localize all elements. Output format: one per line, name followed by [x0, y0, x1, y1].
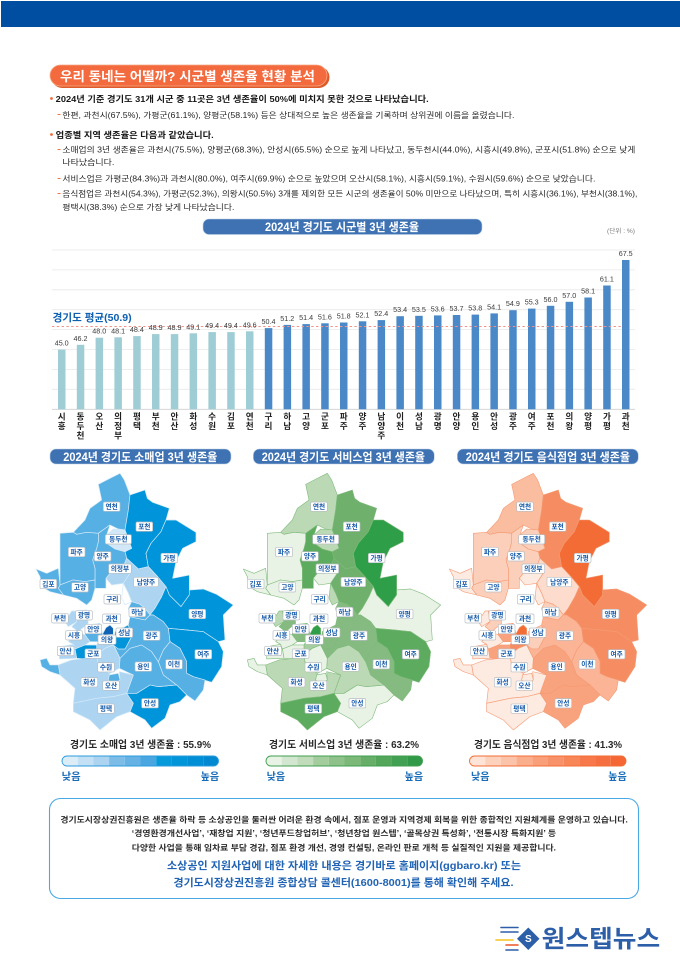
bar chart: 3-year survival by city: [52, 249, 635, 440]
map: restaurant survival by city: 하남: [545, 607, 557, 616]
map: service survival by city: 가평: [371, 553, 383, 562]
map: service survival by city: 광주: [353, 631, 365, 640]
map: retail survival by city: 고양: [74, 583, 86, 592]
map: restaurant survival by city: 김포: [456, 579, 468, 588]
map: restaurant survival by city: 의정부: [524, 564, 543, 573]
bar chart: 3-year survival by city: 명: [434, 420, 442, 431]
map: service survival by city: [243, 473, 441, 730]
bar chart: 3-year survival by city: 52.1: [356, 310, 370, 319]
heading pill: bar chart title: [203, 219, 482, 234]
bar chart: 3-year survival by city: 시: [58, 412, 66, 422]
bar chart: 3-year survival by city: 양: [359, 410, 367, 422]
map: service survival by city: 이천: [375, 660, 387, 669]
map: restaurant survival by city: 평택: [513, 704, 525, 713]
bar chart: 3-year survival by city: 천: [622, 420, 630, 431]
bar chart: 3-year survival by city: 주: [377, 430, 385, 440]
bar chart: 3-year survival by city: 남: [283, 420, 291, 431]
bar chart: 3-year survival by city: 광: [434, 410, 442, 422]
map: retail survival by city: 오산: [105, 681, 117, 690]
map: retail survival by city: 여주: [197, 650, 209, 659]
map: service survival by city: 안양: [295, 624, 307, 633]
bar chart: 3-year survival by city: 천: [246, 420, 254, 431]
legend: retail scale: 높음: [201, 771, 219, 783]
bar chart: 3-year survival by city: 46.2: [74, 334, 88, 343]
map: service survival by city: 안성: [351, 699, 363, 708]
bar chart: 3-year survival by city: 48.9: [168, 323, 182, 332]
map: retail survival by city: [36, 473, 233, 730]
panel: support programs notice: [50, 798, 638, 898]
map: service survival by city: 구리: [314, 595, 326, 604]
bar chart: 3-year survival by city: 양: [584, 410, 592, 422]
bar chart: 3-year survival by city: 안: [490, 412, 498, 422]
bar chart: 3-year survival by city: 포: [321, 421, 329, 431]
map: service survival by city: 용인: [345, 662, 357, 671]
map: retail survival by city: 군포: [87, 650, 99, 658]
map: restaurant survival by city: 과천: [519, 614, 531, 623]
bar chart: 3-year survival by city: 인: [471, 421, 479, 431]
map: retail survival by city: 가평: [163, 553, 175, 562]
map: service survival by city: 여주: [405, 650, 417, 659]
map: retail survival by city: 동두천: [109, 535, 128, 544]
map: restaurant survival by city: 포천: [552, 522, 564, 531]
bar chart: 3-year survival by city: 평: [603, 421, 611, 431]
bar chart: 3-year survival by city: 이: [396, 412, 404, 422]
bar chart: 3-year survival by city: 주: [528, 421, 536, 431]
bar chart: 3-year survival by city: 49.1: [186, 322, 200, 331]
panel: support programs notice: 소상공인 지원사업에 대한 자세한 내용은 경기바로 홈페이지(ggbaro.kr) 또는: [167, 859, 521, 872]
text block: key findings: 나타났습니다.: [62, 157, 114, 167]
map: service survival by city: 수원: [307, 663, 319, 672]
map: restaurant survival by city: 수원: [513, 663, 525, 672]
bar chart: 3-year survival by city: 안: [171, 412, 179, 422]
legend: retail scale: 낮음: [62, 770, 81, 783]
bar chart: 3-year survival by city: 부: [152, 412, 160, 422]
map: restaurant survival by city: 고양: [487, 583, 499, 592]
map: retail survival by city: 광주: [146, 631, 158, 640]
text block: key findings: 음식점업은 과천시(54.3%), 가평군(52.3%), 의왕시(50.5%) 3개를 제외한 모든 시군의 생존율이 50% 미만으로 나타났으며, 특히 시흥시(36.1%), 부천시(38.1%),: [62, 188, 637, 198]
bar chart: 3-year survival by city: 천: [77, 430, 85, 440]
bar chart: 3-year survival by city: 남: [377, 410, 385, 422]
bar chart: 3-year survival by city: 군: [321, 412, 329, 422]
map summary: retail: 경기도 소매업 3년 생존율 : 55.9%: [70, 738, 211, 751]
map: service survival by city: 오산: [312, 681, 324, 690]
logo: Onestep News: 원스텝뉴스: [542, 926, 660, 953]
legend: service scale: 낮음: [267, 770, 285, 783]
bar chart: 3-year survival by city: 파: [340, 412, 348, 422]
bar chart: 3-year survival by city: 49.4: [224, 321, 238, 330]
map: retail survival by city: 연천: [106, 502, 118, 511]
map: retail survival by city: 의정부: [111, 564, 129, 573]
map: retail survival by city: 안양: [87, 624, 99, 633]
bar chart: 3-year survival by city: 57.0: [562, 291, 576, 300]
bar chart: 3-year survival by city: 연: [246, 410, 254, 422]
bar chart: 3-year survival by city: 56.0: [544, 295, 558, 304]
bar chart: 3-year survival by city: 김: [227, 410, 235, 422]
bar chart: 3-year survival by city: 성: [415, 412, 423, 422]
map: restaurant survival by city: 이천: [581, 660, 593, 669]
bar chart: 3-year survival by city: 용: [471, 412, 479, 422]
bar chart: 3-year survival by city: 리: [265, 421, 272, 431]
map: restaurant survival by city: 연천: [519, 502, 531, 511]
bar chart: 3-year survival by city: 구: [265, 412, 273, 422]
heading pill: retail map: 2024년 경기도 소매업 3년 생존율: [63, 450, 218, 464]
map: restaurant survival by city: 양주: [510, 552, 522, 561]
bar chart: 3-year survival by city: 53.8: [468, 304, 482, 313]
bar chart: 3-year survival by city: 고: [302, 412, 310, 422]
bar chart: 3-year survival by city: 의: [114, 412, 122, 422]
map: restaurant survival by city: 오산: [518, 681, 530, 690]
bar chart: 3-year survival by city: 51.8: [337, 312, 351, 320]
map: service survival by city: 과천: [313, 614, 325, 623]
map: retail survival by city: 용인: [137, 662, 149, 671]
map: restaurant survival by city: 시흥: [481, 631, 493, 640]
map: restaurant survival by city: 성남: [532, 628, 544, 637]
map: service survival by city: 연천: [313, 502, 325, 511]
bar chart: 3-year survival by city: 의: [565, 412, 573, 422]
bar chart: 3-year survival by city: 정: [114, 420, 122, 431]
bar chart: 3-year survival by city: 주: [359, 421, 367, 431]
map: service survival by city: 의왕: [308, 635, 320, 644]
map: retail survival by city: 광명: [78, 611, 90, 620]
map: service survival by city: 동두천: [316, 535, 335, 544]
bar chart: 3-year survival by city: 52.4: [374, 309, 388, 318]
legend: service scale: 높음: [405, 771, 423, 783]
map: service survival by city: 시흥: [275, 631, 287, 640]
map: restaurant survival by city: 화성: [497, 678, 509, 687]
bar chart: 3-year survival by city: 51.6: [318, 312, 332, 321]
text block: key findings: 소매업의 3년 생존율은 과천시(75.5%), 양평군(68.3%), 안성시(65.5%) 순으로 높게 나타났고, 동두천시(44.0%), 시흥시(49.8%), 군포시(51.8%) 순으로 낮게: [62, 144, 635, 154]
bar chart: 3-year survival by city: 49.6: [243, 320, 257, 329]
heading pill: section title: 우리 동네는 어떨까? 시군별 생존율 현황 분석: [60, 69, 315, 84]
bar chart: 3-year survival by city: 남: [415, 420, 423, 431]
text block: key findings: 한편, 과천시(67.5%), 가평군(61.1%), 양평군(58.1%) 등은 상대적으로 높은 생존율을 기록하며 상위권에 이름을 올렸습니다.: [62, 110, 514, 120]
callout: Gyeonggi average: 경기도 평균(50.9): [53, 311, 132, 324]
bar chart: 3-year survival by city: 하: [283, 410, 291, 422]
text block: key findings: 2024년 기준 경기도 31개 시군 중 11곳은 3년 생존율이 50%에 미치지 못한 것으로 나타났습니다.: [56, 94, 429, 104]
heading pill: bar chart title: 2024년 경기도 시군별 3년 생존율: [265, 220, 419, 234]
bar chart: 3-year survival by city: 천: [547, 420, 555, 431]
map: restaurant survival by city: 용인: [551, 662, 563, 671]
map: service survival by city: 광명: [285, 611, 297, 620]
map: restaurant survival by city: [449, 473, 647, 730]
bar chart: 3-year survival by city: 가: [603, 410, 611, 422]
map: restaurant survival by city: 구리: [520, 595, 532, 604]
panel: support programs notice: ‘경영환경개선사업’, ‘재창업 지원’, ‘청년푸드창업허브’, ‘청년창업 원스텝’, ‘골목상권 특성화’, ‘전통시장 특화지원’ 등: [132, 828, 557, 838]
legend: restaurant scale: [470, 756, 627, 783]
map: retail survival by city: 안산: [60, 646, 72, 655]
bar chart: 3-year survival by city: 50.4: [262, 317, 276, 326]
map: service survival by city: 의정부: [318, 564, 337, 573]
map: service survival by city: 파주: [278, 547, 290, 556]
map: restaurant survival by city: 안산: [473, 646, 485, 655]
bar chart: 3-year survival by city: 동: [77, 412, 85, 422]
text block: key findings: [50, 94, 637, 212]
map: restaurant survival by city: 안성: [557, 699, 569, 708]
map summary: service: 경기도 서비스업 3년 생존율 : 63.2%: [269, 738, 419, 751]
map: retail survival by city: 포천: [138, 522, 150, 531]
map: retail survival by city: 성남: [118, 628, 130, 637]
bar chart: 3-year survival by city: 양: [302, 420, 310, 431]
panel: support programs notice: 경기도시장상권진흥원 종합상담 콜센터(1600-8001)를 통해 확인해 주세요.: [174, 876, 514, 889]
bar chart: 3-year survival by city: 성: [189, 421, 197, 431]
bar chart: 3-year survival by city: 포: [547, 412, 555, 422]
map: restaurant survival by city: 군포: [501, 650, 513, 658]
map: restaurant survival by city: 광주: [559, 631, 571, 640]
bar chart: 3-year survival by city: 수: [208, 412, 216, 422]
map: restaurant survival by city: 가평: [577, 553, 589, 562]
text block: key findings: 평택시(38.3%) 순으로 가장 낮게 나타났습니다.: [62, 202, 234, 212]
map: service survival by city: 하남: [339, 607, 351, 616]
bar chart: 3-year survival by city: 48.1: [111, 326, 125, 335]
bar chart: 3-year survival by city: 51.4: [299, 313, 313, 322]
map: restaurant survival by city: 부천: [467, 614, 479, 623]
map: restaurant survival by city: 안양: [501, 624, 513, 633]
map: service survival by city: 김포: [250, 579, 262, 588]
map: retail survival by city: 하남: [131, 607, 143, 616]
bar chart: 3-year survival by city: 안: [453, 412, 461, 422]
bar chart: 3-year survival by city: 천: [152, 420, 160, 431]
map: service survival by city: 평택: [307, 704, 319, 713]
panel: support programs notice: 다양한 사업을 통해 임차료 부담 경감, 점포 환경 개선, 경영 컨설팅, 온라인 판로 개척 등 실질적인 지원을 제공합니다.: [132, 842, 556, 852]
bar chart: 3-year survival by city: 왕: [565, 420, 573, 431]
bar chart: 3-year survival by city: 광: [509, 410, 517, 422]
heading pill: restaurant map: 2024년 경기도 음식점업 3년 생존율: [466, 450, 630, 464]
legend: service scale: [266, 756, 423, 783]
bar chart: 3-year survival by city: 53.5: [412, 305, 426, 314]
bar chart: 3-year survival by city: 화: [189, 410, 197, 422]
bar chart: 3-year survival by city: 48.0: [92, 327, 106, 336]
map: restaurant survival by city: 파주: [484, 547, 496, 556]
bar chart: 3-year survival by city: 45.0: [55, 339, 69, 348]
map: service survival by city: 성남: [326, 628, 338, 637]
bar chart: 3-year survival by city: 과: [622, 410, 630, 422]
panel: support programs notice: 경기도시장상권진흥원은 생존율 하락 등 소상공인을 둘러싼 어려운 환경 속에서, 점포 운영과 지역경제 회복을 위한 종합적인 지원체계를 운영하고 있습니다.: [60, 814, 628, 824]
map: service survival by city: 남양주: [344, 577, 363, 586]
map: retail survival by city: 수원: [100, 663, 112, 672]
map: service survival by city: 포천: [346, 522, 358, 531]
bar chart: 3-year survival by city: 평: [133, 412, 141, 422]
bar chart: 3-year survival by city: 51.2: [280, 314, 294, 323]
map: service survival by city: 양주: [304, 552, 316, 561]
bar chart: 3-year survival by city: 두: [77, 421, 85, 431]
bar chart: 3-year survival by city: 54.1: [487, 302, 501, 311]
logo: Onestep News: S: [525, 934, 532, 945]
map: retail survival by city: 부천: [54, 614, 66, 623]
bar chart: 3-year survival by city: 포: [227, 421, 235, 431]
bar chart: 3-year survival by city: 55.3: [525, 298, 539, 307]
map: retail survival by city: 남양주: [137, 577, 155, 586]
bar chart: 3-year survival by city: 원: [208, 420, 216, 431]
map: retail survival by city: 화성: [83, 678, 95, 687]
map: restaurant survival by city: 양평: [605, 609, 617, 618]
bar chart: 3-year survival by city: 53.6: [431, 304, 445, 313]
map: service survival by city: 안산: [267, 646, 279, 655]
heading pill: service map: 2024년 경기도 서비스업 3년 생존율: [262, 450, 425, 464]
map: retail survival by city: 이천: [168, 660, 180, 669]
map: retail survival by city: 양평: [191, 609, 203, 618]
text block: key findings: 업종별 지역 생존율은 다음과 같았습니다.: [56, 130, 214, 140]
bar chart: 3-year survival by city: 택: [133, 420, 141, 431]
bar chart: 3-year survival by city: 산: [95, 420, 103, 431]
bar chart: 3-year survival by city: 천: [396, 420, 404, 431]
text block: key findings: 서비스업은 가평군(84.3%)과 과천시(80.0%), 여주시(69.9%) 순으로 높았으며 오산시(58.1%), 시흥시(59.1%), 수원시(59.6%) 순으로 낮았습니다.: [62, 174, 595, 184]
bar chart: 3-year survival by city: 부: [114, 430, 122, 440]
unit note: (단위 : %): [607, 227, 635, 235]
bar chart: 3-year survival by city: 성: [490, 421, 498, 431]
map: retail survival by city: 양주: [97, 552, 109, 561]
map: retail survival by city: 의왕: [101, 635, 113, 644]
map: retail survival by city: 구리: [106, 595, 118, 604]
map: restaurant survival by city: 동두천: [522, 535, 541, 544]
bar chart: 3-year survival by city: 48.4: [130, 325, 144, 334]
bar chart: 3-year survival by city: 양: [453, 420, 461, 431]
bar chart: 3-year survival by city: 61.1: [600, 274, 614, 284]
bar chart: 3-year survival by city: 67.5: [619, 249, 633, 258]
bar chart: 3-year survival by city: 49.4: [205, 321, 219, 330]
bar chart: 3-year survival by city: 58.1: [581, 286, 595, 296]
bar chart: 3-year survival by city: 산: [171, 420, 179, 431]
bar chart: 3-year survival by city: 48.9: [149, 323, 163, 332]
legend: retail scale: [62, 756, 219, 783]
map: restaurant survival by city: 의왕: [514, 635, 526, 644]
map: service survival by city: 부천: [261, 614, 273, 623]
map: retail survival by city: 평택: [100, 704, 112, 713]
map: service survival by city: 고양: [281, 583, 293, 592]
map: retail survival by city: 파주: [71, 547, 83, 556]
map: retail survival by city: 김포: [42, 579, 54, 588]
bar chart: 3-year survival by city: 평: [584, 421, 592, 431]
bar chart: 3-year survival by city: 여: [528, 410, 536, 422]
bar chart: 3-year survival by city: 양: [377, 420, 385, 431]
legend: restaurant scale: 낮음: [471, 770, 490, 783]
map: retail survival by city: 과천: [106, 614, 118, 623]
map: service survival by city: 군포: [295, 650, 307, 658]
map summary: restaurant: 경기도 음식점업 3년 생존율 : 41.3%: [474, 738, 622, 751]
heading pill: section title: [50, 65, 330, 88]
bar chart: 3-year survival by city: 흥: [58, 420, 66, 431]
logo: Onestep News: [496, 926, 660, 953]
map: service survival by city: 화성: [291, 678, 303, 687]
map: retail survival by city: 시흥: [68, 631, 80, 640]
map: restaurant survival by city: 광명: [491, 611, 503, 620]
bar chart: 3-year survival by city: 오: [95, 412, 103, 422]
map: restaurant survival by city: 남양주: [550, 577, 569, 586]
bar chart: 3-year survival by city: 54.9: [506, 299, 520, 308]
legend: restaurant scale: 높음: [608, 771, 627, 783]
bar chart: 3-year survival by city: 53.7: [450, 304, 464, 313]
map: service survival by city: 양평: [399, 609, 411, 618]
map: restaurant survival by city: 여주: [611, 650, 623, 659]
bar chart: 3-year survival by city: 주: [509, 421, 517, 431]
bar chart: 3-year survival by city: 53.4: [393, 305, 407, 314]
map: retail survival by city: 안성: [144, 699, 156, 708]
header band: [1, 1, 680, 27]
bar chart: 3-year survival by city: 주: [340, 421, 348, 431]
